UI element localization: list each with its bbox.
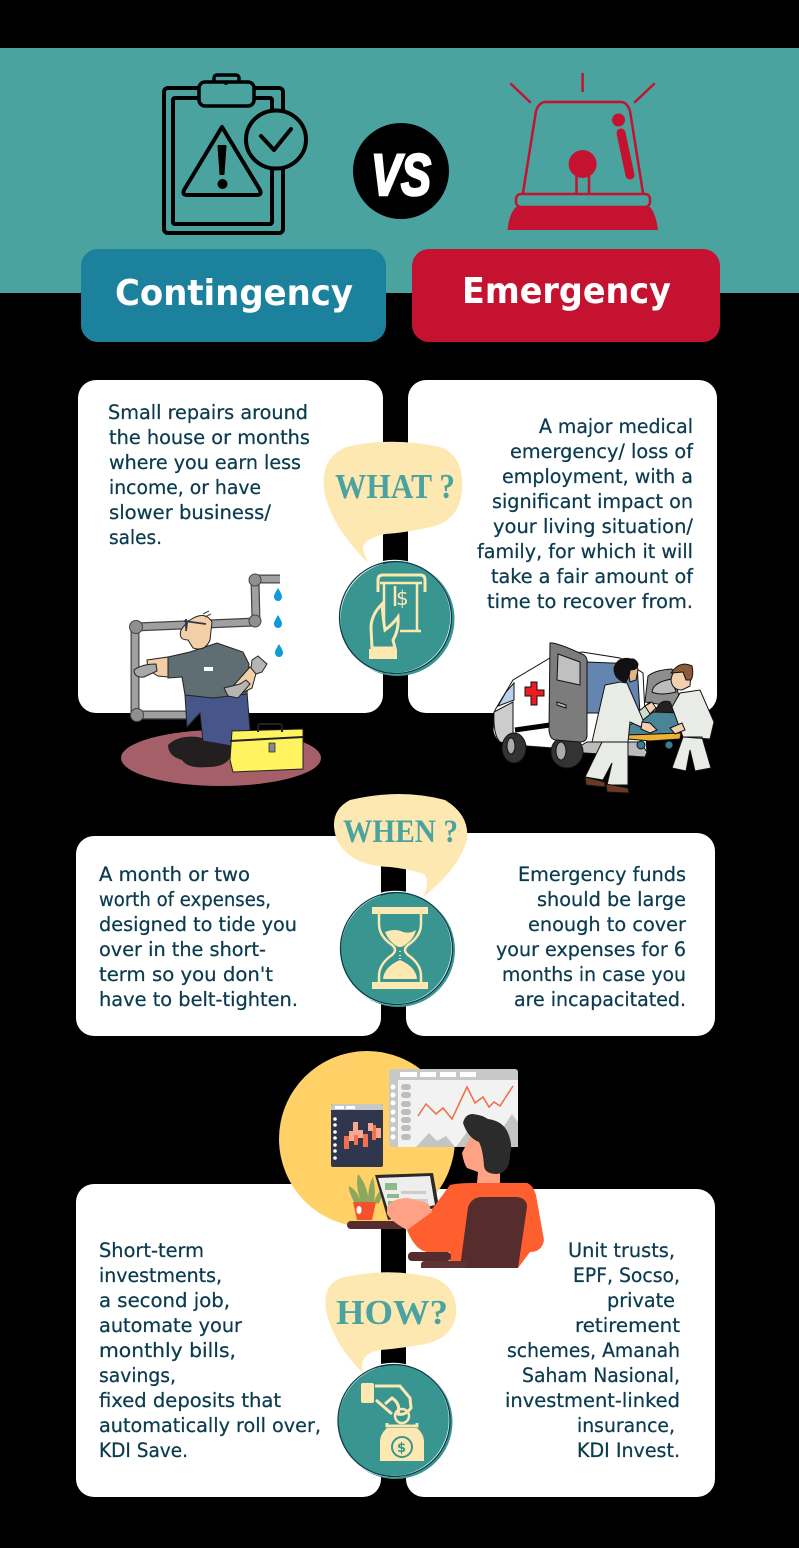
- panel: what contingency: where you earn less: [109, 451, 301, 474]
- panel: how contingency: savings,: [99, 1364, 176, 1387]
- panel: how emergency: retirement: [575, 1314, 680, 1337]
- callout: WHEN: [334, 794, 467, 897]
- panel: what emergency: [408, 380, 717, 713]
- panel: how contingency: automatically roll over,: [99, 1414, 321, 1437]
- callout: HOW: HOW?: [336, 1293, 448, 1332]
- panel: what emergency: emergency/ loss of: [510, 440, 694, 463]
- illustration: plumber fixing pipes: [121, 574, 321, 786]
- panel: when contingency: [76, 836, 381, 1036]
- panel: how contingency: investments,: [99, 1264, 222, 1287]
- panel: how emergency: schemes, Amanah: [507, 1339, 680, 1362]
- illustration: ambulance and medics: [493, 643, 714, 793]
- callout: HOW: [325, 1272, 456, 1377]
- panel: when emergency: months in case you: [502, 963, 686, 986]
- panel: when emergency: [406, 833, 715, 1036]
- heading: Emergency: [412, 249, 720, 342]
- icon: cash machine badge: [338, 560, 454, 676]
- panel: what contingency: Small repairs around: [108, 401, 308, 424]
- panel: when emergency: your expenses for 6: [496, 938, 686, 961]
- panel: what contingency: sales.: [109, 526, 162, 549]
- heading: Emergency: Emergency: [462, 271, 671, 312]
- panel: what emergency: take a fair amount of: [491, 565, 694, 588]
- panel: how contingency: Short-term: [99, 1239, 204, 1262]
- panel: how contingency: automate your: [99, 1314, 243, 1337]
- panel: how emergency: insurance,: [577, 1414, 675, 1437]
- icon: coin in jar badge: $: [397, 1441, 406, 1456]
- panel: what emergency: family, for which it will: [477, 540, 693, 563]
- heading: Contingency: [81, 249, 386, 342]
- callout: WHAT: [324, 442, 462, 563]
- panel: what emergency: employment, with a: [502, 465, 693, 488]
- panel: what emergency: time to recover from.: [487, 590, 693, 613]
- panel: how emergency: Saham Nasional,: [522, 1364, 680, 1387]
- panel: how emergency: EPF, Socso,: [573, 1264, 680, 1287]
- icon: VS badge: [353, 123, 449, 219]
- panel: how contingency: fixed deposits that: [99, 1389, 281, 1412]
- panel: how contingency: monthly bills,: [99, 1339, 236, 1362]
- icon: coin in jar badge: [336, 1364, 452, 1479]
- panel: how contingency: KDI Save.: [99, 1439, 188, 1462]
- panel: how emergency: Unit trusts,: [568, 1239, 675, 1262]
- panel: how emergency: private: [607, 1289, 675, 1312]
- panel: how emergency: [406, 1189, 715, 1497]
- panel: when emergency: enough to cover: [528, 913, 687, 936]
- panel: what contingency: [78, 380, 383, 713]
- panel: what emergency: your living situation/: [493, 515, 693, 538]
- heading: Contingency: Contingency: [115, 273, 353, 314]
- panel: when emergency: are incapacitated.: [514, 988, 686, 1011]
- panel: when contingency: term so you don't: [99, 963, 273, 986]
- panel: when contingency: have to belt-tighten.: [99, 988, 298, 1011]
- panel: how emergency: KDI Invest.: [577, 1439, 680, 1462]
- panel: what contingency: the house or months: [109, 426, 310, 449]
- panel: what contingency: slower business/: [109, 501, 271, 524]
- icon: VS badge: VS: [371, 143, 431, 208]
- illustration: investor with charts: [279, 1051, 544, 1268]
- panel: how contingency: a second job,: [99, 1289, 230, 1312]
- icon: clipboard with warning: [164, 75, 306, 233]
- panel: what emergency: significant impact on: [492, 490, 693, 513]
- panel: what emergency: A major medical: [539, 415, 693, 438]
- panel: how emergency: investment-linked: [505, 1389, 680, 1412]
- panel: when contingency: designed to tide you: [99, 913, 297, 936]
- panel: when contingency: A month or two: [99, 863, 250, 886]
- icon: emergency siren: [508, 74, 658, 230]
- callout: WHEN: WHEN ?: [343, 814, 458, 850]
- panel: when contingency: worth of expenses,: [99, 888, 271, 911]
- panel: how contingency: [76, 1184, 381, 1497]
- header band: [0, 48, 799, 293]
- icon: cash machine badge: $: [396, 586, 409, 610]
- panel: what contingency: income, or have: [109, 476, 261, 499]
- panel: when contingency: over in the short-: [99, 938, 266, 961]
- icon: hourglass badge: [339, 892, 455, 1007]
- panel: when emergency: should be large: [537, 888, 686, 911]
- callout: WHAT: WHAT ?: [335, 467, 455, 506]
- panel: when emergency: Emergency funds: [518, 863, 686, 886]
